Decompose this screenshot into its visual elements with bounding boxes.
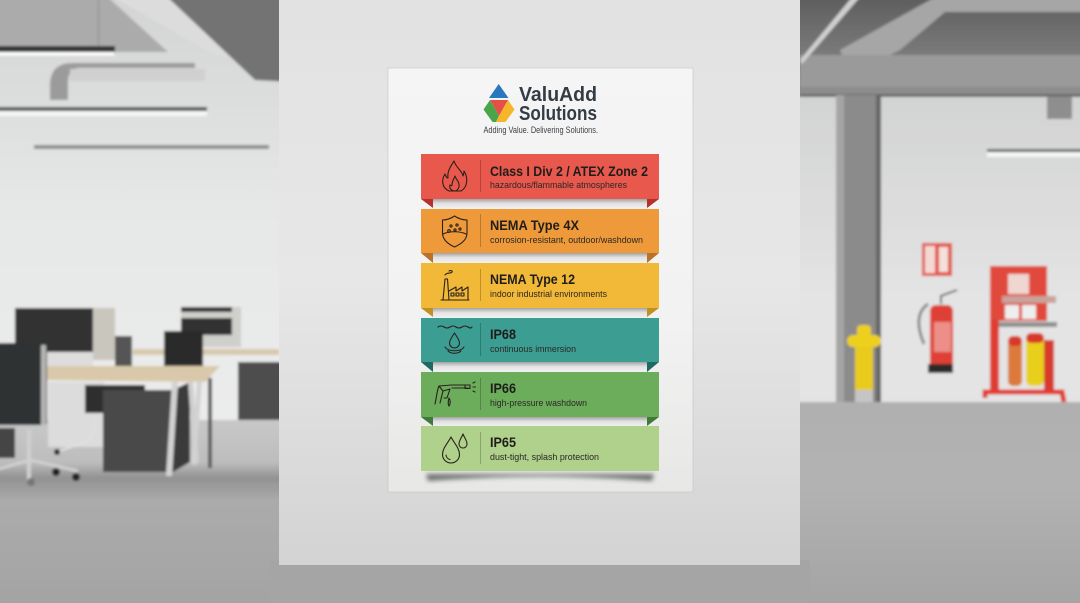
description: continuous immersion [490,344,576,355]
icon: water immersion [438,326,472,353]
icon: shield [442,216,467,247]
poster [388,68,693,492]
wall panel [279,0,800,565]
icon: flame [443,161,467,191]
floor strip below the wall [270,560,810,603]
band 6: IP65 [421,426,659,481]
logo mark [484,84,514,122]
logo [484,84,598,135]
band 2: NEMA Type 4X [421,209,659,263]
label: IP65 [490,434,516,450]
description: indoor industrial environments [490,289,607,300]
background: office on the left [0,0,292,603]
tagline: Adding Value. Delivering Solutions. [484,125,598,135]
band 3: NEMA Type 12 [421,263,659,318]
description: high-pressure washdown [490,398,587,409]
description: dust-tight, splash protection [490,452,599,463]
description: corrosion-resistant, outdoor/washdown [490,235,643,246]
label: NEMA Type 4X [490,217,580,233]
label: IP66 [490,380,516,396]
band 1: Class I Div 2 / ATEX Zone 2 [421,154,659,209]
logo: Solutions [519,103,597,125]
label: Class I Div 2 / ATEX Zone 2 [490,163,648,179]
label: NEMA Type 12 [490,271,575,287]
band 5: IP66 [421,372,659,427]
logo wordmark: ValuAdd [519,84,597,106]
background: warehouse on the right [797,0,1080,603]
label: IP68 [490,326,516,342]
description: hazardous/flammable atmospheres [490,180,627,191]
icon: pressure washer [435,382,476,406]
icon: water drops [442,434,467,463]
icon: factory [441,271,469,300]
band 4: IP68 [421,318,659,372]
